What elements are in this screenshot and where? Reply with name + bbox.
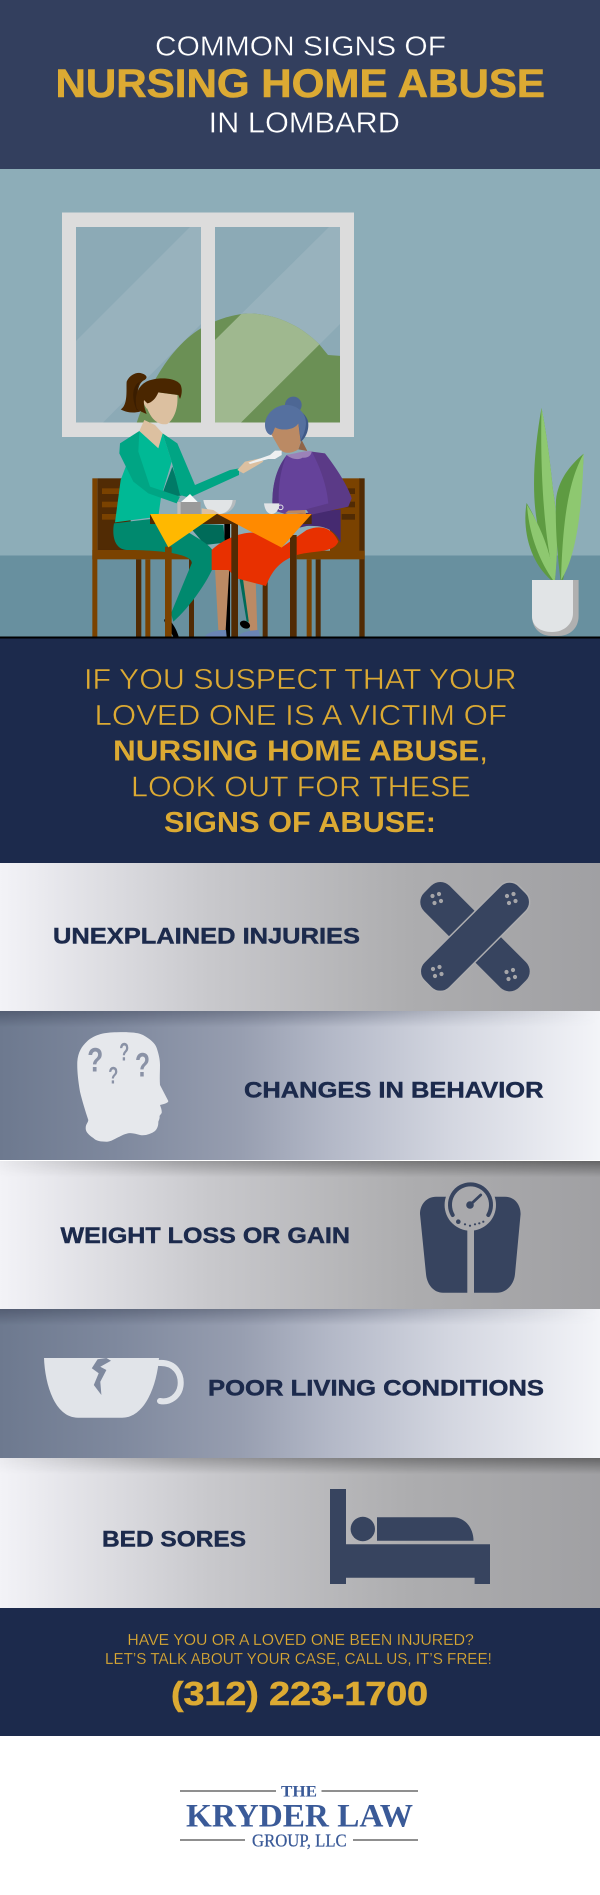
label: UNEXPLAINED INJURIES — [53, 923, 360, 948]
intro line 3: NURSING HOME ABUSE , — [113, 736, 488, 768]
header banner — [0, 0, 600, 169]
footer call to action — [0, 1608, 600, 1736]
plant — [525, 408, 584, 636]
icon: head with question marks: ? — [135, 1047, 150, 1085]
panel: changes in behavior — [0, 1011, 600, 1160]
icon: person in bed — [330, 1489, 490, 1584]
title line 3: IN LOMBARD — [209, 108, 400, 140]
intro panel — [0, 638, 600, 863]
resident head — [265, 397, 308, 453]
title line 1: COMMON SIGNS OF — [155, 30, 446, 62]
nurse hand on table — [202, 508, 219, 514]
panel: weight loss or gain — [0, 1161, 600, 1309]
nurse head and hair — [121, 373, 182, 424]
nurse torso — [115, 420, 239, 522]
logo: The Kryder Law Group, LLC — [0, 1736, 600, 1895]
teacup — [264, 503, 283, 514]
intro line 2: LOVED ONE IS A VICTIM OF — [94, 700, 507, 732]
label: WEIGHT LOSS OR GAIN — [60, 1223, 350, 1248]
orange tablecloth corner — [217, 514, 312, 548]
call to action line 2: LET’S TALK ABOUT YOUR CASE, CALL US, IT’S FREE! — [105, 1651, 492, 1668]
nurse back leg — [187, 523, 250, 622]
resident legs — [205, 568, 260, 637]
icon: head with question marks: ? — [108, 1062, 118, 1089]
icon: broken teacup — [44, 1358, 181, 1418]
panel: poor living conditions — [0, 1309, 600, 1458]
label: POOR LIVING CONDITIONS — [208, 1376, 544, 1401]
intro line 5: SIGNS OF ABUSE: — [164, 807, 436, 839]
panel: bed sores — [0, 1458, 600, 1608]
logo: The Kryder Law Group, LLC: KRYDER LAW — [186, 1799, 413, 1835]
nurse hand and spoon — [237, 451, 282, 473]
title line 2: NURSING HOME ABUSE — [56, 62, 545, 106]
icon: head with question marks: ? — [119, 1039, 129, 1067]
icon: bathroom scale — [420, 1179, 521, 1293]
bowl — [203, 500, 236, 514]
people, chairs and table — [92, 373, 365, 637]
nurse pants — [113, 518, 216, 622]
label: CHANGES IN BEHAVIOR — [244, 1078, 544, 1103]
call to action line 1: HAVE YOU OR A LOVED ONE BEEN INJURED? — [127, 1632, 474, 1649]
yellow tablecloth corner — [150, 514, 217, 547]
label: BED SORES — [102, 1527, 246, 1552]
nurse shoes — [164, 619, 251, 637]
pot — [532, 580, 579, 636]
resident hand — [285, 510, 306, 514]
right chair — [263, 478, 365, 637]
left chair — [92, 478, 194, 637]
illustration: nurse feeding elderly resident — [0, 169, 600, 638]
icon: head with question marks: ? — [87, 1042, 103, 1080]
phone number: (312) 223-1700 — [171, 1675, 428, 1712]
logo: The Kryder Law Group, LLC: THE — [281, 1784, 317, 1801]
icon: head with question marks — [77, 1032, 168, 1142]
window — [62, 212, 354, 437]
table — [150, 514, 312, 637]
panel: unexplained injuries — [0, 863, 600, 1011]
resident skirt — [212, 527, 338, 586]
logo: The Kryder Law Group, LLC: GROUP, LLC — [252, 1831, 347, 1851]
napkin holder — [177, 494, 201, 514]
icon: crossed bandages — [415, 877, 535, 997]
resident top — [272, 451, 352, 543]
table pole — [224, 524, 230, 637]
intro line 4: LOOK OUT FOR THESE — [131, 772, 471, 804]
intro line 1: IF YOU SUSPECT THAT YOUR — [84, 664, 517, 696]
